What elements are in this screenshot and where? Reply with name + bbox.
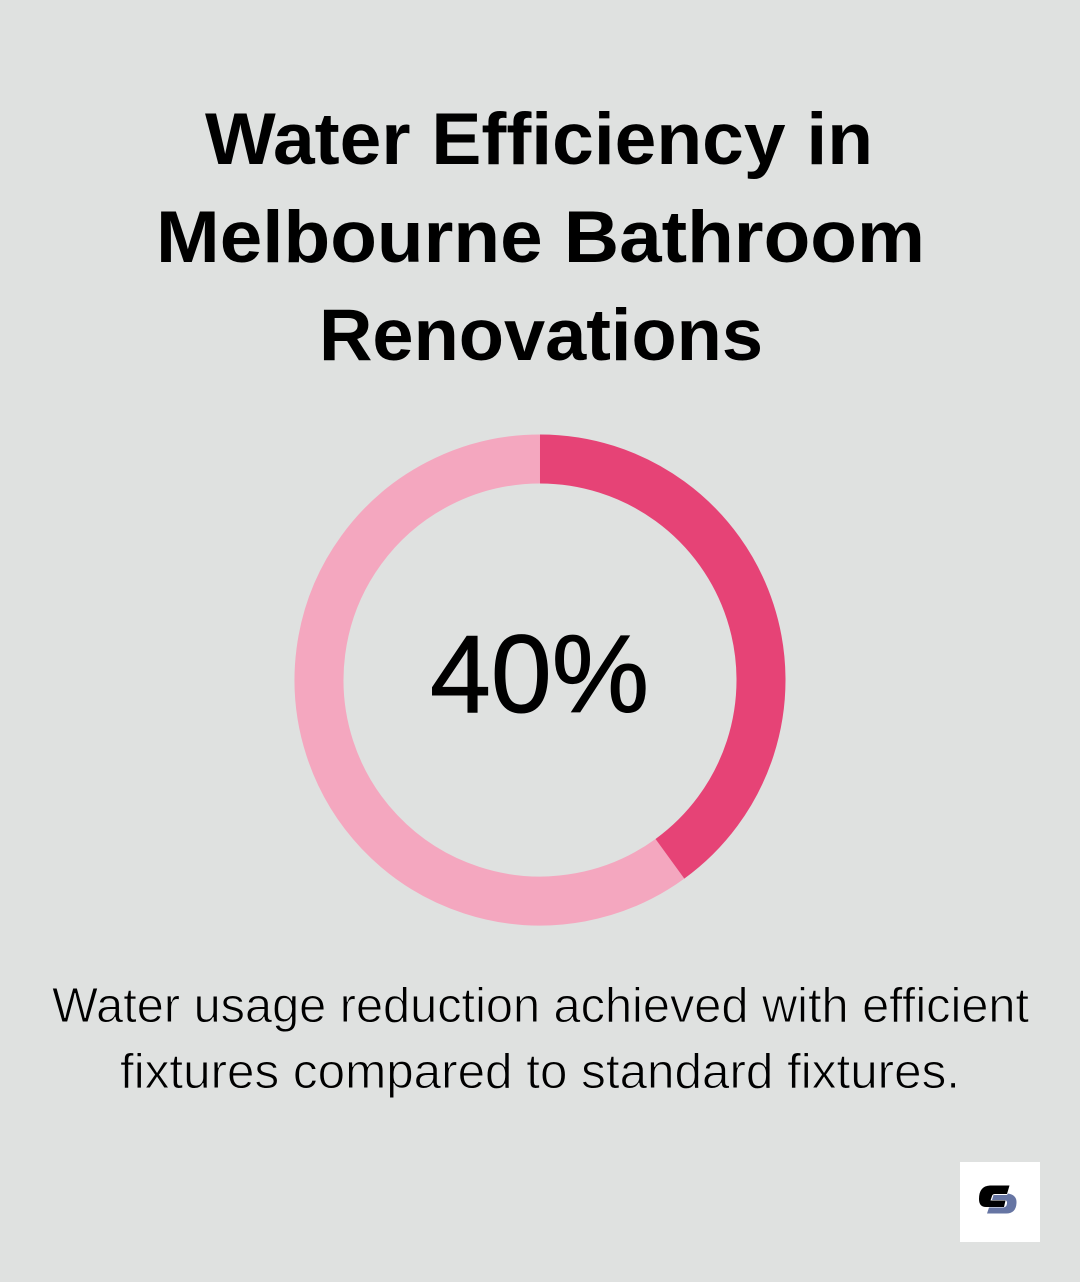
title: Melbourne Bathroom [156,197,925,278]
center value: 40% [430,613,649,736]
logo mark: black part [979,1186,1010,1207]
title [156,99,925,376]
title: Water Efficiency in [205,99,873,180]
description [52,979,1029,1099]
logo mark: blue part [987,1194,1017,1214]
description: fixtures compared to standard fixtures. [120,1045,960,1099]
donut segment: 40% [540,459,761,859]
title: Renovations [319,295,763,376]
logo badge [960,1162,1040,1242]
donut chart: 40% [319,459,761,901]
donut track: remaining 60% [319,459,670,901]
description: Water usage reduction achieved with efficient [52,979,1029,1033]
